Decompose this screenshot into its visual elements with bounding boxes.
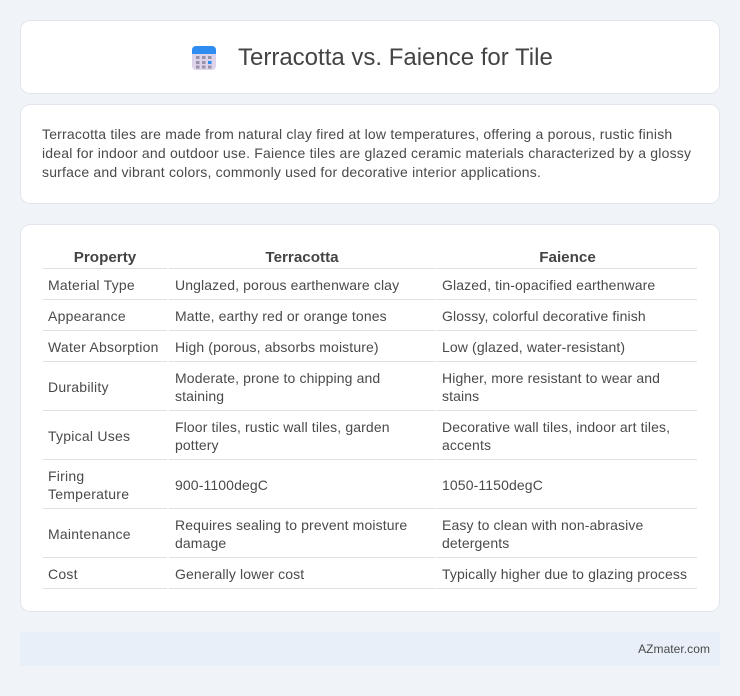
table rows: Requires sealing to prevent moisture xyxy=(175,517,407,533)
table rows: Temperature xyxy=(48,486,129,502)
table rows: Easy to clean with non-abrasive xyxy=(442,517,643,533)
table rows xyxy=(43,268,697,589)
icon: calendar xyxy=(192,46,216,70)
table rows: Durability xyxy=(48,379,109,395)
title: Terracotta vs. Faience for Tile xyxy=(238,44,553,71)
table rows: 1050-1150degC xyxy=(442,477,543,493)
table headers: Property xyxy=(74,249,136,266)
header panel xyxy=(20,20,720,94)
table rows: Low (glazed, water-resistant) xyxy=(442,339,625,355)
table headers: Faience xyxy=(539,249,596,266)
table rows: Glossy, colorful decorative finish xyxy=(442,308,646,324)
table rows: Firing xyxy=(48,468,84,484)
intro paragraph: surface and vibrant colors, commonly used for decorative interior applications. xyxy=(42,164,541,180)
intro paragraph: ideal for indoor and outdoor use. Faience tiles are glazed ceramic materials characterized by a glossy xyxy=(42,145,691,161)
footer source text: AZmater.com xyxy=(638,642,710,656)
table rows: Floor tiles, rustic wall tiles, garden xyxy=(175,419,390,435)
table rows: 900-1100degC xyxy=(175,477,268,493)
table headers xyxy=(74,249,596,266)
table rows: Typical Uses xyxy=(48,428,130,444)
table rows: staining xyxy=(175,388,224,404)
table rows: accents xyxy=(442,437,491,453)
table rows: Glazed, tin-opacified earthenware xyxy=(442,277,655,293)
table rows: Maintenance xyxy=(48,526,131,542)
table rows: Matte, earthy red or orange tones xyxy=(175,308,387,324)
table rows: High (porous, absorbs moisture) xyxy=(175,339,379,355)
table rows: damage xyxy=(175,535,226,551)
table rows: pottery xyxy=(175,437,219,453)
table rows: detergents xyxy=(442,535,509,551)
table rows: Higher, more resistant to wear and xyxy=(442,370,660,386)
table rows: Moderate, prone to chipping and xyxy=(175,370,380,386)
table rows: Generally lower cost xyxy=(175,566,304,582)
table rows: Appearance xyxy=(48,308,126,324)
table rows: Cost xyxy=(48,566,78,582)
comparison table panel xyxy=(20,224,720,612)
intro paragraph xyxy=(42,126,691,180)
intro text panel xyxy=(20,104,720,204)
table rows: Decorative wall tiles, indoor art tiles, xyxy=(442,419,670,435)
table rows: Typically higher due to glazing process xyxy=(442,566,687,582)
footer bar xyxy=(20,632,720,666)
table rows: Unglazed, porous earthenware clay xyxy=(175,277,399,293)
intro paragraph: Terracotta tiles are made from natural clay fired at low temperatures, offering a porous, rustic finish xyxy=(42,126,672,142)
table rows: Material Type xyxy=(48,277,135,293)
table rows: stains xyxy=(442,388,479,404)
table rows: Water Absorption xyxy=(48,339,159,355)
table headers: Terracotta xyxy=(265,249,339,266)
